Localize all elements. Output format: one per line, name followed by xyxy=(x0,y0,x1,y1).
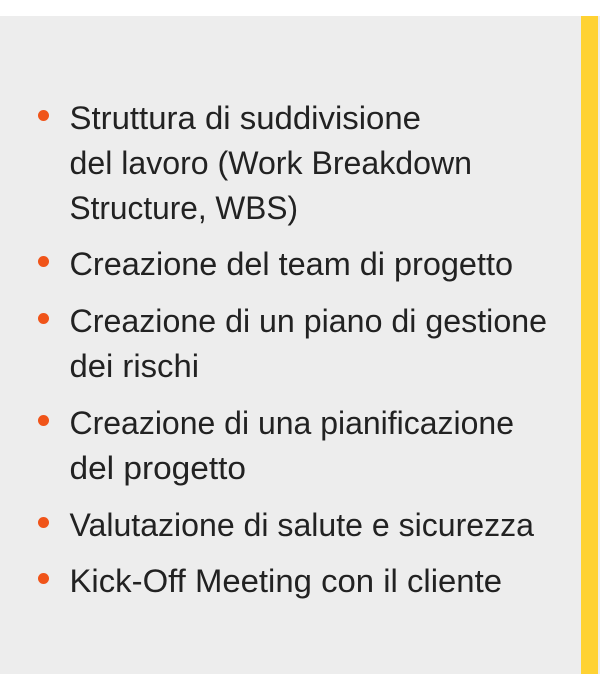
bullet item: work breakdown structure: del lavoro (Work Breakdown xyxy=(70,145,472,181)
bullet item: project team: Creazione del team di progetto xyxy=(70,246,513,282)
bullet item: risk management plan xyxy=(38,303,547,384)
bullet item: project schedule: del progetto xyxy=(70,450,246,486)
bullet item: project schedule xyxy=(38,405,514,486)
bullet item: health and safety: Valutazione di salute e sicurezza xyxy=(70,507,534,543)
bullet item: risk management plan: dei rischi xyxy=(70,348,199,384)
bullet item: kick-off meeting: Kick-Off Meeting con il cliente xyxy=(70,563,502,599)
bullet item: work breakdown structure: Structure, WBS) xyxy=(70,190,298,226)
bullet item: project schedule: Creazione di una pianificazione xyxy=(70,405,514,441)
bullet item: risk management plan: Creazione di un piano di gestione xyxy=(70,303,547,339)
bullet item: work breakdown structure xyxy=(38,100,472,226)
bullet item: work breakdown structure: Struttura di suddivisione xyxy=(70,100,421,136)
accent bar: yellow xyxy=(581,16,598,674)
